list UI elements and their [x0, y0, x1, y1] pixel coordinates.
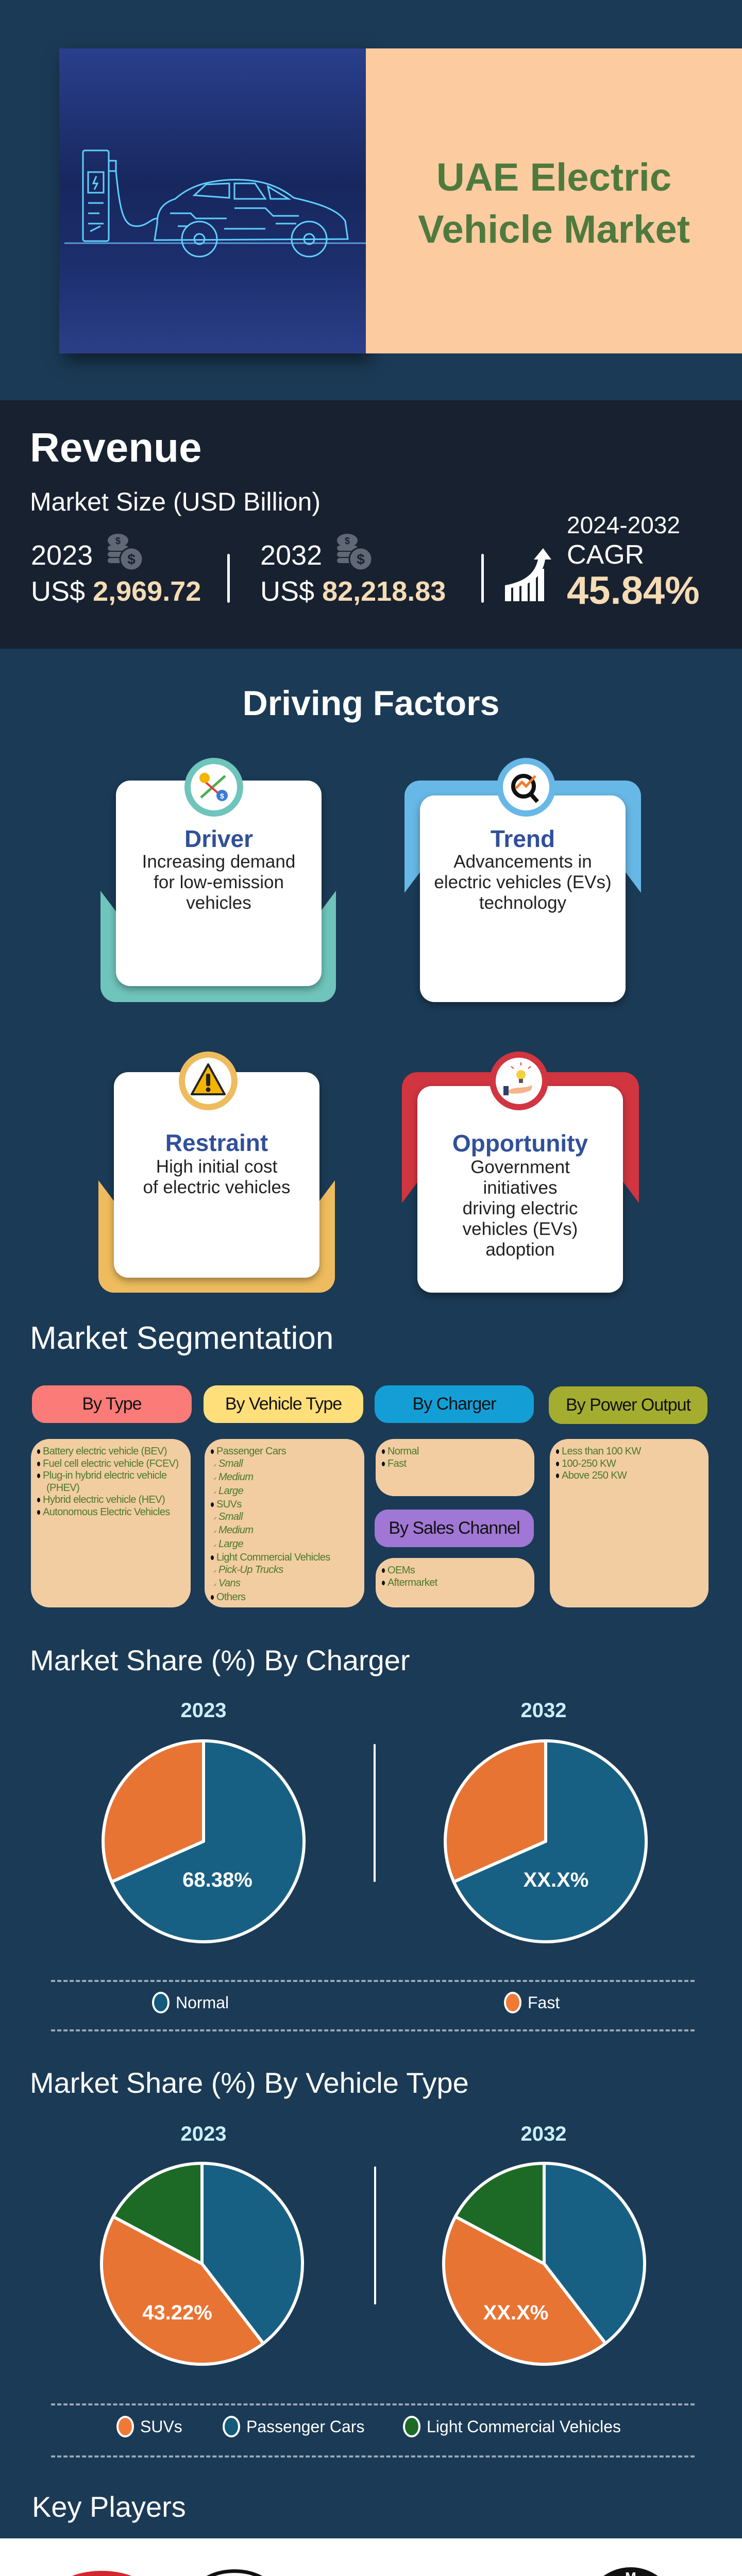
segmentation: by vehicle type: Small: [218, 1458, 243, 1469]
panel: restraint: [98, 1052, 335, 1293]
pie chart: vehicle type 2032: XX.X%: [483, 2301, 548, 2324]
segmentation: by type: By Type: [82, 1394, 142, 1414]
icon: trend: [498, 758, 554, 817]
segmentation: by vehicle type: [204, 1385, 364, 1607]
segmentation: by sales channel: By Sales Channel: [389, 1518, 520, 1538]
panel: opportunity: [402, 1052, 639, 1298]
logo: bmw: [603, 2567, 657, 2576]
CAGR: 2024-2032: [567, 512, 680, 538]
segmentation: by charger: Fast: [387, 1458, 406, 1469]
stat 2032: [260, 534, 446, 607]
panel: opportunity: adoption: [485, 1240, 555, 1260]
panel: trend: [404, 758, 641, 1007]
segmentation: by type: Hybrid electric vehicle (HEV): [43, 1494, 165, 1505]
segmentation: by vehicle type: Medium: [218, 1471, 254, 1483]
segmentation: by charger: Normal: [387, 1446, 419, 1457]
segmentation: by type: Autonomous Electric Vehicles: [43, 1506, 170, 1518]
legend: vehicle type: Light Commercial Vehicles: [427, 2417, 621, 2436]
year labels: 2023: [181, 1699, 226, 1722]
panel: trend: Advancements in: [453, 852, 592, 872]
title: Vehicle Market: [418, 208, 690, 251]
stat 2032: 2032: [260, 540, 322, 571]
panel: driver: Driver: [184, 825, 253, 852]
logo: nissan: [206, 2569, 263, 2576]
panel: restraint: of electric vehicles: [143, 1177, 290, 1197]
panel: opportunity: Government: [470, 1157, 570, 1177]
panel: trend: Trend: [491, 825, 555, 852]
year labels: 2023: [181, 2123, 226, 2145]
divider: [374, 1744, 376, 1882]
segmentation: by power output: Less than 100 KW: [562, 1446, 641, 1457]
icon: coins: $: [127, 551, 136, 567]
segmentation: by power output: Above 250 KW: [562, 1470, 627, 1481]
CAGR: CAGR: [567, 540, 644, 570]
segmentation: by power output: By Power Output: [566, 1395, 690, 1415]
CAGR: 45.84%: [567, 569, 700, 613]
divider: [374, 2166, 376, 2304]
legend: charger: Normal: [176, 1993, 229, 2011]
panel: driver: [100, 758, 336, 1002]
segmentation: by vehicle type: Pick-Up Trucks: [218, 1564, 283, 1575]
segmentation: by type: Battery electric vehicle (BEV): [43, 1446, 167, 1457]
legend: vehicle type: SUVs: [140, 2417, 182, 2436]
revenue band: [0, 400, 742, 649]
icon: coins: $: [115, 536, 121, 546]
segmentation: by vehicle type: Vans: [218, 1578, 240, 1589]
legend: vehicle type: [116, 2416, 621, 2437]
title: UAE Electric: [436, 156, 671, 199]
panel: key players logos: [0, 2538, 742, 2576]
icon: warning: [179, 1052, 238, 1110]
icon: opportunity: [490, 1052, 548, 1110]
panel: driver: for low-emission: [154, 872, 284, 892]
logo: tesla: [72, 2571, 131, 2576]
panel: trend: electric vehicles (EVs): [434, 872, 612, 892]
stat 2023: US$ 2,969.72: [31, 576, 201, 607]
segmentation: by type: [31, 1385, 192, 1607]
icon: coins: [108, 534, 142, 570]
segmentation: by vehicle type: Medium: [218, 1524, 254, 1536]
header: image panel: [59, 48, 366, 353]
stat 2023: [31, 534, 201, 607]
panel: driver: Increasing demand: [142, 852, 295, 872]
market size subheading: Market Size (USD Billion): [30, 487, 321, 516]
legend: vehicle type: Passenger Cars: [246, 2417, 364, 2436]
text: 2032: [521, 2123, 566, 2145]
panel: restraint: Restraint: [165, 1129, 268, 1156]
divider: [227, 554, 230, 603]
pie chart: charger 2032: [444, 1739, 648, 1943]
segmentation: by charger: OEMs: [387, 1565, 415, 1576]
segmentation: by type: Fuel cell electric vehicle (FCEV): [43, 1458, 179, 1469]
header: title panel: [366, 48, 742, 353]
revenue heading: Revenue: [30, 425, 201, 470]
heading: market segmentation: Market Segmentation: [30, 1320, 333, 1356]
segmentation: by vehicle type: Passenger Cars: [216, 1446, 286, 1457]
segmentation: by vehicle type: Others: [216, 1591, 245, 1602]
segmentation: by type: (PHEV): [46, 1482, 79, 1493]
panel: opportunity: Opportunity: [452, 1130, 588, 1157]
panel: trend: technology: [479, 893, 566, 913]
segmentation: by charger: By Charger: [413, 1394, 496, 1414]
segmentation: by vehicle type: Large: [218, 1538, 243, 1550]
icon: coins: [337, 534, 371, 570]
segmentation: by vehicle type: Large: [218, 1485, 243, 1496]
icon: growth chart: [505, 548, 551, 601]
segmentation: by vehicle type: By Vehicle Type: [225, 1394, 342, 1414]
legend: charger: Fast: [528, 1993, 560, 2011]
pie chart: vehicle type 2023: 43.22%: [142, 2301, 212, 2324]
icon: driver: $: [220, 792, 224, 800]
heading: market share by charger: Market Share (%) By Charger: [30, 1644, 410, 1676]
CAGR: [567, 512, 700, 613]
pie chart: charger 2023: 68.38%: [182, 1869, 252, 1891]
heading: key players: Key Players: [32, 2490, 186, 2523]
segmentation: by power output: 100-250 KW: [562, 1458, 616, 1469]
text: 2032: [521, 1699, 566, 1722]
panel: opportunity: vehicles (EVs): [463, 1219, 578, 1239]
panel: opportunity: driving electric: [463, 1198, 578, 1218]
panel: restraint: High initial cost: [156, 1157, 277, 1177]
pie chart: charger 2032: XX.X%: [524, 1869, 588, 1891]
segmentation: by sales channel: [375, 1510, 534, 1547]
segmentation: by power output: [549, 1386, 709, 1607]
icon: driver: [184, 758, 243, 817]
icon: coins: $: [345, 536, 350, 546]
stat 2032: US$ 82,218.83: [260, 576, 446, 607]
title: [418, 156, 690, 251]
heading: driving factors: Driving Factors: [243, 684, 499, 723]
stat 2023: 2023: [31, 540, 93, 571]
legend: charger: [152, 1992, 560, 2013]
divider: [481, 554, 484, 603]
pie chart: charger 2023: [102, 1739, 306, 1943]
pie chart: vehicle type 2023: [100, 2162, 304, 2366]
icon: coins: $: [357, 551, 365, 567]
segmentation: by vehicle type: Small: [218, 1511, 243, 1522]
segmentation: by type: Plug-in hybrid electric vehicle: [43, 1470, 166, 1481]
segmentation: by charger: [375, 1385, 534, 1607]
panel: driver: vehicles: [186, 893, 251, 913]
heading: market share by vehicle type: Market Share (%) By Vehicle Type: [30, 2066, 469, 2099]
segmentation: by vehicle type: Light Commercial Vehicles: [216, 1552, 330, 1563]
segmentation: by charger: Aftermarket: [387, 1577, 437, 1588]
panel: opportunity: initiatives: [483, 1178, 557, 1198]
pie chart: vehicle type 2032: [442, 2162, 646, 2366]
segmentation: by vehicle type: SUVs: [216, 1499, 242, 1510]
